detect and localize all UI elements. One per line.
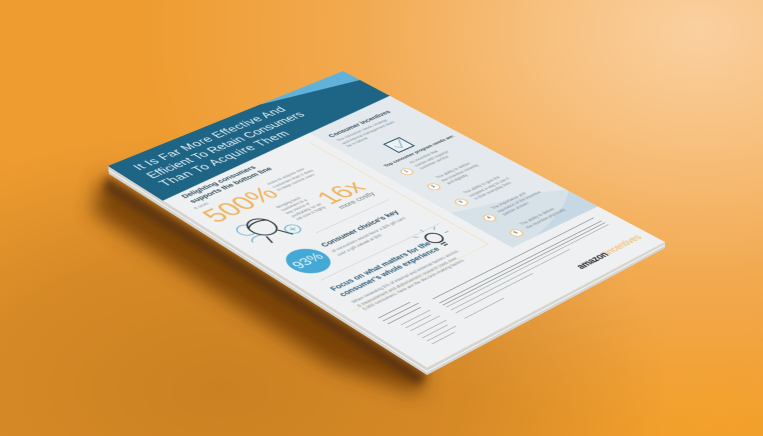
brochure page xyxy=(108,71,665,368)
heading: delighting consumers: supports the bottom line xyxy=(187,166,274,204)
text: more costly: more costly xyxy=(336,191,377,210)
title: It Is Far More Effective And xyxy=(131,105,290,172)
stat circle: 93%: 93% xyxy=(289,251,328,271)
text: focus body: 6 measurement and disbursement research tools over xyxy=(356,257,459,308)
badge 4: 4 xyxy=(486,216,493,220)
badge 1 xyxy=(397,167,416,177)
text: bringing back: old core is highly xyxy=(295,206,327,221)
icon: light bulb xyxy=(412,226,449,246)
heading: focus: Focus on what matters for the xyxy=(328,241,433,292)
title: Than To Acquire Them xyxy=(156,129,293,188)
need 2: and digitally xyxy=(445,174,469,185)
need 2: The ability to deliver xyxy=(435,162,472,179)
badge 5: 5 xyxy=(513,231,520,235)
badge 3 xyxy=(452,197,471,207)
need 3: in their everyday lives xyxy=(473,181,513,201)
need 3: recipient a way to use it xyxy=(468,177,511,198)
text: bringing back: profitability for an xyxy=(290,203,323,218)
need 1: comes with superior xyxy=(413,150,450,167)
need 4: reputation of the incentive xyxy=(496,190,543,213)
need 3: The ability to give the xyxy=(462,176,502,195)
title: Efficient To Retain Consumers xyxy=(143,110,308,180)
text: bringing back: Bringing back xyxy=(275,196,302,209)
text: incentives body: and internal management team xyxy=(341,121,396,145)
text: more to acquire: to keep current ones xyxy=(276,173,316,192)
heading: focus: consumer’s whole experience xyxy=(337,246,442,298)
label: it costs: It costs xyxy=(193,202,210,210)
text: focus body: When reviewing 5% of internal and external factors across xyxy=(350,250,460,304)
need 3 xyxy=(462,176,513,201)
need 5: the incentive physically xyxy=(525,208,567,229)
list: needs xyxy=(400,150,567,237)
text: incentives body: The consumer needs strategy xyxy=(336,119,389,142)
need 5: The ability to deliver xyxy=(519,207,556,226)
stat circle: 93% xyxy=(277,244,340,278)
heading: consumer incentives: Consumer incentives xyxy=(326,109,393,139)
need 2: the incentive instantly xyxy=(440,164,480,182)
need 1: customer service xyxy=(418,155,451,170)
text: bringing back xyxy=(275,196,327,221)
text: bringing back: customers is a xyxy=(280,199,309,212)
badge 2: 2 xyxy=(430,185,437,188)
badge 3: 3 xyxy=(458,200,464,204)
divider xyxy=(316,199,389,233)
divider xyxy=(320,223,440,281)
badge 4 xyxy=(480,213,499,223)
badge 2 xyxy=(424,182,443,192)
text: more to acquire: more to acquire new xyxy=(266,168,306,186)
badge 1: 1 xyxy=(403,170,410,173)
text: consumer choice: of consumers would favor a $25 gift card xyxy=(330,217,407,253)
text: consumer choice: over a gift valued at $30 xyxy=(336,234,383,257)
heading: delighting consumers: Delighting consumers xyxy=(180,165,258,199)
heading: top needs: Top consumer program needs are: xyxy=(382,134,456,168)
heading: consumer choice: Consumer choice’s key xyxy=(319,209,401,248)
text: focus body: 5,000 consumers, here are the decision-making factors xyxy=(362,259,466,311)
text: incentives body: be a natural xyxy=(346,137,369,148)
icon: people xyxy=(236,218,302,244)
need 4: partner chosen xyxy=(501,202,531,216)
header band and background shapes xyxy=(108,71,598,312)
stat: 500%: 500% xyxy=(196,183,285,227)
need 4: The importance and xyxy=(490,192,528,210)
icon: checkbox xyxy=(382,137,416,153)
fine print xyxy=(378,218,609,344)
text: bringing back: key source of xyxy=(285,202,312,215)
logo: amazon incentives: amazonincentives xyxy=(573,233,644,271)
badge 5 xyxy=(507,228,526,238)
stat: 16x: 16x xyxy=(311,177,372,208)
text: more to acquire: customers than it does xyxy=(271,169,315,189)
need 1: An incentive that xyxy=(408,150,440,164)
